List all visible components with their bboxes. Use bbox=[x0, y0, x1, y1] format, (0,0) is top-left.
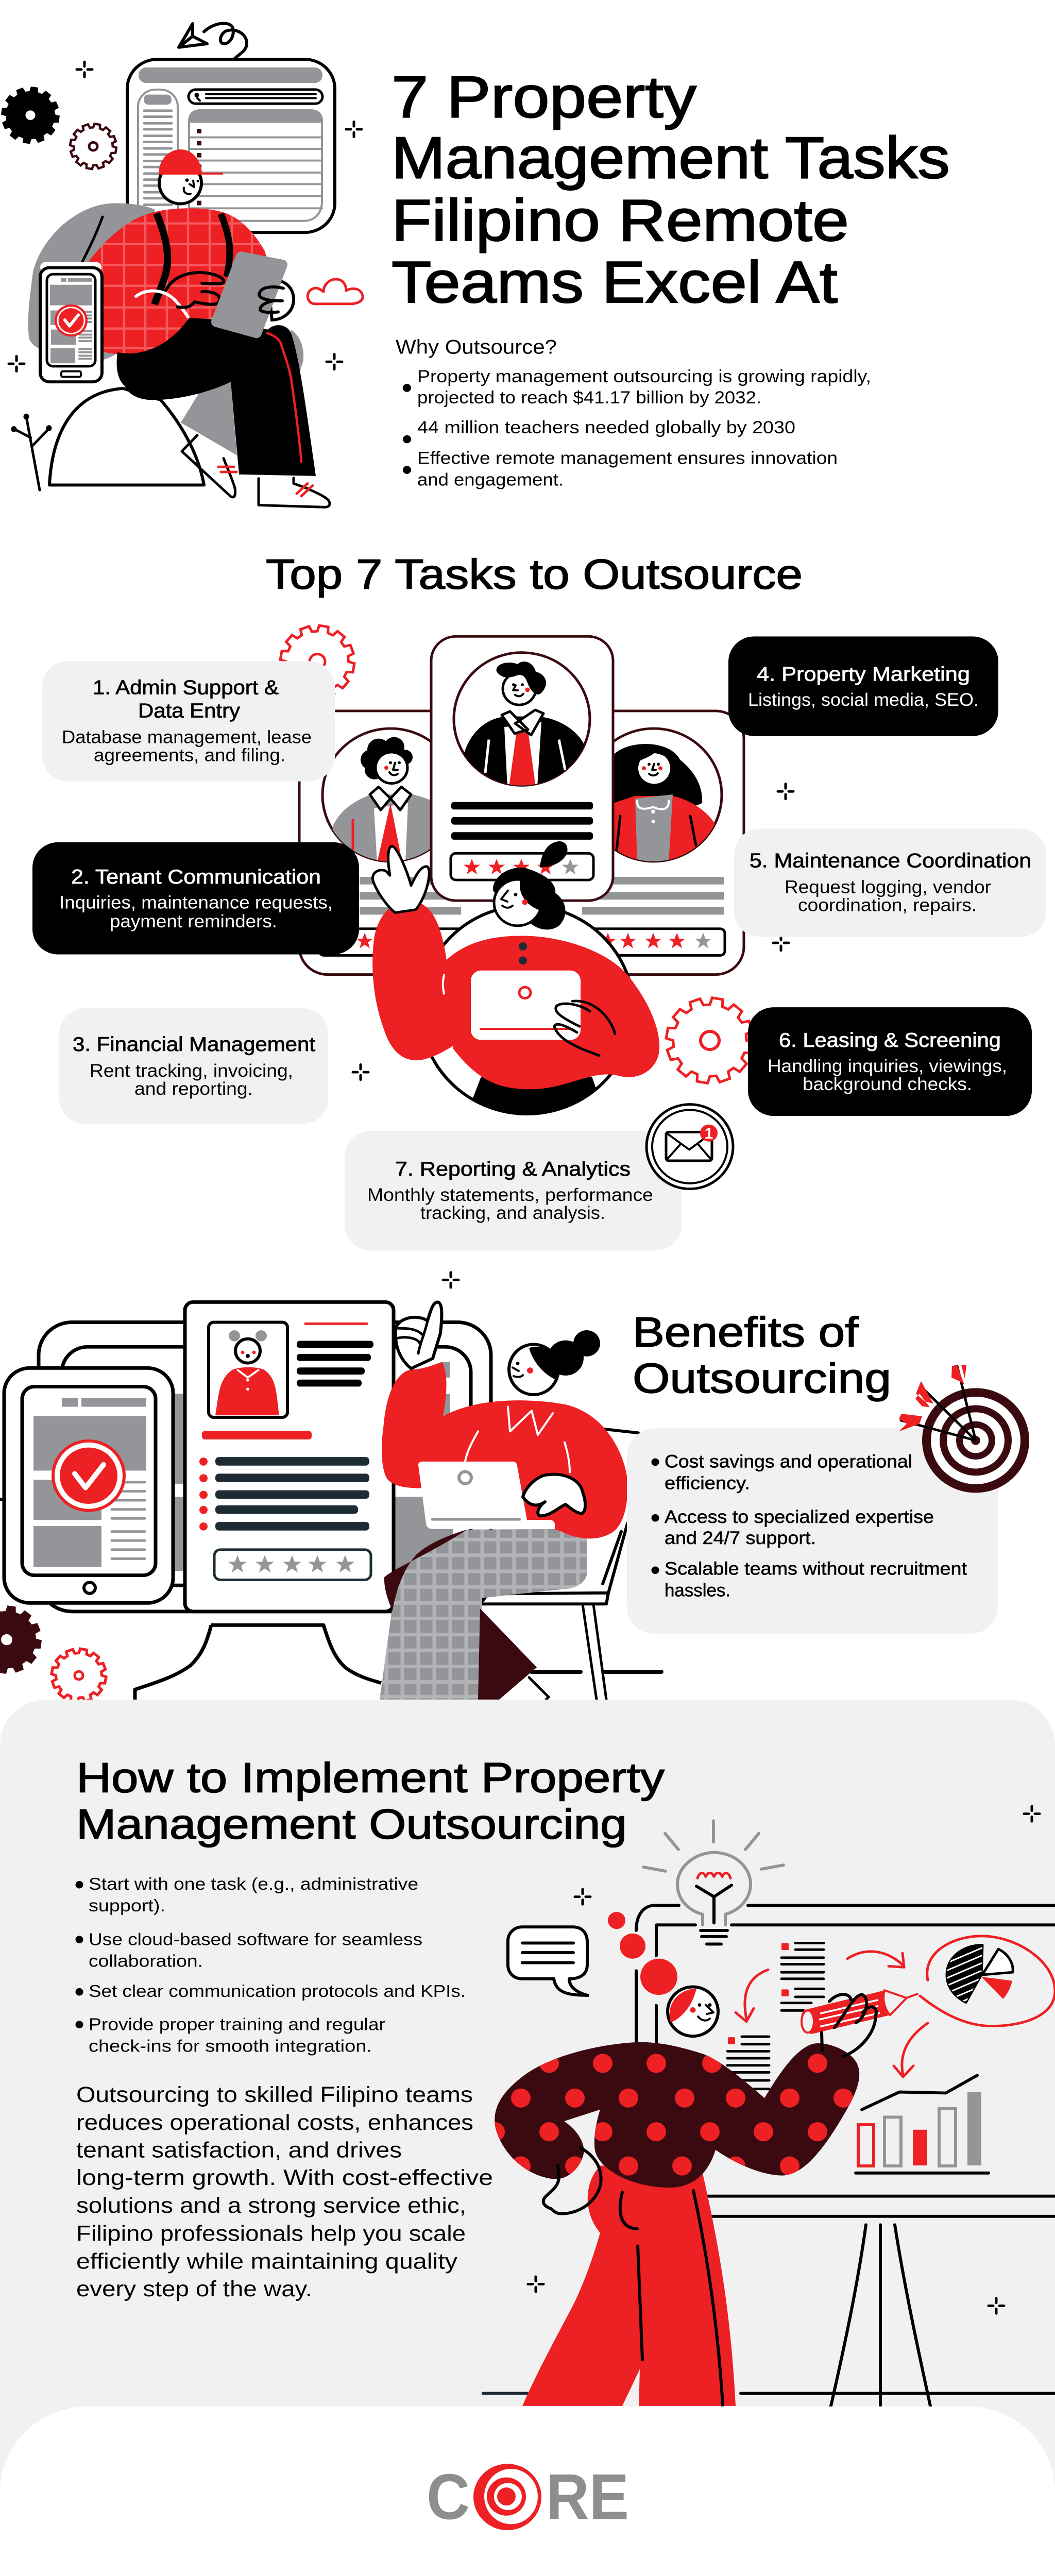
red dots bbox=[608, 1912, 677, 1995]
panel: task 1 bbox=[42, 661, 335, 782]
icon: red gear right bbox=[659, 991, 760, 1090]
text block: why outsource: Effective remote management ensures innovation bbox=[417, 449, 838, 468]
panel: task 6 bbox=[748, 1007, 1032, 1116]
person: polka dot sweater bbox=[485, 2042, 859, 2188]
far leg bbox=[181, 382, 237, 455]
text block: conclusion: solutions and a strong service ethic, bbox=[76, 2193, 466, 2218]
icon: black gear bbox=[0, 83, 63, 147]
text block: steps: Set clear communication protocols and KPIs. bbox=[89, 1982, 466, 2001]
icon: outline gear bbox=[66, 121, 120, 173]
panel: benefits list: efficiency. bbox=[665, 1473, 750, 1494]
icon: chat bubble bbox=[508, 1927, 588, 1995]
panel: task 5: coordination, repairs. bbox=[798, 895, 977, 915]
panel: task 4: Listings, social media, SEO. bbox=[748, 689, 979, 710]
panel: task 5: 5. Maintenance Coordination bbox=[750, 850, 1031, 872]
text block: why outsource: Why Outsource? bbox=[396, 336, 557, 358]
icon: mail notification bbox=[646, 1105, 733, 1189]
heading: benefits: Benefits of bbox=[633, 1308, 859, 1355]
monitor bbox=[0, 1322, 491, 1700]
panel: task 1: 1. Admin Support & bbox=[93, 676, 279, 699]
pants bbox=[117, 318, 316, 476]
woman with laptop bbox=[372, 841, 659, 1122]
woman: sweater and laptop bbox=[382, 1302, 627, 1538]
text block: steps bbox=[75, 1875, 466, 2056]
footer panel bbox=[0, 2406, 1055, 2576]
panel: task 6: Handling inquiries, viewings, bbox=[768, 1056, 1007, 1076]
hands and tablet bbox=[136, 257, 294, 333]
hero illustration bbox=[0, 23, 363, 507]
panel: task 6: background checks. bbox=[803, 1074, 972, 1094]
sparkles bbox=[9, 62, 362, 371]
text block: steps: check-ins for smooth integration. bbox=[89, 2037, 372, 2056]
text block: conclusion: long-term growth. With cost-effective bbox=[76, 2166, 493, 2190]
panel: how to implement background bbox=[0, 1700, 1055, 2576]
woman: plaid trousers bbox=[376, 1524, 587, 1706]
panel: task 2: payment reminders. bbox=[110, 911, 277, 931]
person: back and far leg bbox=[28, 203, 303, 382]
plaid shirt bbox=[90, 208, 266, 354]
heading: how to implement: How to Implement Property bbox=[76, 1754, 665, 1801]
back card text lines and ratings bbox=[319, 877, 725, 955]
logo: CORE bbox=[427, 2461, 629, 2533]
text block: steps: collaboration. bbox=[89, 1952, 203, 1971]
icon: pencil and hand bbox=[801, 1990, 917, 2056]
text block: why outsource: 44 million teachers needed globally by 2030 bbox=[417, 418, 795, 437]
woman: head bbox=[509, 1330, 600, 1395]
panel: benefits list: Scalable teams without recruitment bbox=[665, 1558, 967, 1579]
logo: CORE: RE bbox=[546, 2461, 629, 2533]
icon: red outline gear bbox=[47, 1645, 110, 1706]
title: Management Tasks bbox=[392, 125, 950, 191]
panel: task 5: Request logging, vendor bbox=[785, 877, 991, 897]
heading: benefits bbox=[633, 1308, 891, 1402]
panel: benefits list: Access to specialized expertise bbox=[665, 1506, 934, 1527]
panel: benefits list bbox=[627, 1428, 998, 1634]
heading: how to implement bbox=[76, 1754, 665, 1848]
red arrows and pie bubble bbox=[736, 1936, 1055, 2077]
text block: conclusion bbox=[76, 2083, 493, 2301]
heading: benefits: Outsourcing bbox=[633, 1354, 891, 1402]
resume document bbox=[185, 1302, 394, 1612]
logo: CORE: C bbox=[427, 2461, 470, 2533]
icon: cloud bbox=[308, 279, 363, 304]
presentation illustration bbox=[482, 1806, 1055, 2406]
back card bbox=[299, 711, 744, 975]
phone with check badge bbox=[40, 262, 102, 382]
text block: why outsource: Property management outsourcing is growing rapidly, bbox=[417, 367, 871, 386]
panel: task 2 bbox=[32, 842, 359, 955]
shoes bbox=[182, 435, 330, 507]
panel: task 7: 7. Reporting & Analytics bbox=[395, 1158, 631, 1180]
hill bbox=[49, 388, 204, 485]
panel: task 2: 2. Tenant Communication bbox=[71, 866, 321, 888]
heading: how to implement: Management Outsourcing bbox=[76, 1800, 627, 1848]
panel: task 1: agreements, and filing. bbox=[94, 745, 285, 765]
tablet with check badge bbox=[4, 1368, 173, 1603]
text block: conclusion: every step of the way. bbox=[76, 2277, 312, 2301]
panel: task 7: tracking, and analysis. bbox=[420, 1203, 605, 1223]
sparkles bbox=[528, 1806, 1040, 2313]
hand on hip bbox=[543, 2148, 601, 2214]
panel: task 1: Data Entry bbox=[138, 700, 240, 722]
panel: benefits list: hassles. bbox=[665, 1580, 730, 1601]
text block: steps: Use cloud-based software for seamless bbox=[89, 1930, 422, 1949]
text block: why outsource bbox=[396, 336, 871, 489]
sparkles bbox=[353, 784, 793, 1080]
text block: steps: support). bbox=[89, 1896, 165, 1916]
browser window bbox=[127, 59, 335, 241]
icon: paper plane and squiggle bbox=[179, 23, 247, 70]
text block: why outsource: projected to reach $41.17 billion by 2032. bbox=[417, 388, 761, 408]
icon: maroon gear bbox=[0, 1601, 46, 1678]
panel: task 3: 3. Financial Management bbox=[73, 1033, 315, 1056]
whiteboard bbox=[482, 1905, 1055, 2406]
sparkle bbox=[443, 1273, 458, 1287]
plant bbox=[11, 414, 52, 490]
icon: light bulb bbox=[643, 1821, 784, 1944]
panel: task 2: Inquiries, maintenance requests, bbox=[59, 892, 333, 913]
title: Filipino Remote bbox=[392, 187, 849, 253]
head with cap bbox=[159, 149, 223, 204]
panel: benefits list: and 24/7 support. bbox=[665, 1528, 816, 1548]
chair bbox=[482, 1428, 661, 1700]
text block: steps: Start with one task (e.g., administrative bbox=[89, 1875, 418, 1894]
title: Teams Excel At bbox=[392, 249, 838, 315]
panel: task 6: 6. Leasing & Screening bbox=[779, 1029, 1001, 1052]
left profile bbox=[321, 727, 430, 862]
panel: task 7: Monthly statements, performance bbox=[367, 1184, 653, 1205]
panel: task 4 bbox=[728, 636, 998, 736]
panel: task 4: 4. Property Marketing bbox=[757, 663, 970, 685]
panel: task 3: Rent tracking, invoicing, bbox=[90, 1060, 293, 1081]
panel: task 1: Database management, lease bbox=[62, 727, 312, 747]
icon: mail notification: 1 bbox=[705, 1125, 713, 1142]
text block: conclusion: reduces operational costs, enhances bbox=[76, 2110, 473, 2135]
panel: task 3 bbox=[59, 1008, 328, 1124]
text block: conclusion: Filipino professionals help you scale bbox=[76, 2222, 466, 2246]
text block: conclusion: Outsourcing to skilled Filipino teams bbox=[76, 2083, 473, 2107]
bar chart bbox=[856, 2075, 989, 2173]
benefits illustration bbox=[0, 1273, 661, 1706]
text block: why outsource: and engagement. bbox=[417, 470, 564, 489]
document lists bbox=[727, 1943, 824, 2089]
panel: task 7 bbox=[345, 1131, 682, 1250]
panel: task 3: and reporting. bbox=[134, 1078, 253, 1099]
title bbox=[392, 64, 950, 315]
heading: top 7 tasks: Top 7 Tasks to Outsource bbox=[266, 550, 803, 598]
icon: target with arrows bbox=[899, 1365, 1029, 1493]
right profile bbox=[614, 727, 723, 862]
icon: red gear top bbox=[275, 620, 360, 703]
text block: conclusion: tenant satisfaction, and drives bbox=[76, 2138, 402, 2162]
head bbox=[668, 1987, 718, 2036]
title: 7 Property bbox=[392, 64, 696, 130]
panel: task 5 bbox=[734, 828, 1046, 937]
text block: steps: Provide proper training and regular bbox=[89, 2015, 385, 2034]
person: red trousers bbox=[522, 2165, 736, 2406]
center profile card bbox=[431, 636, 613, 901]
central illustration: profile cards and woman bbox=[275, 620, 793, 1122]
text block: conclusion: efficiently while maintaining quality bbox=[76, 2249, 457, 2274]
panel: benefits list: Cost savings and operational bbox=[665, 1451, 912, 1472]
